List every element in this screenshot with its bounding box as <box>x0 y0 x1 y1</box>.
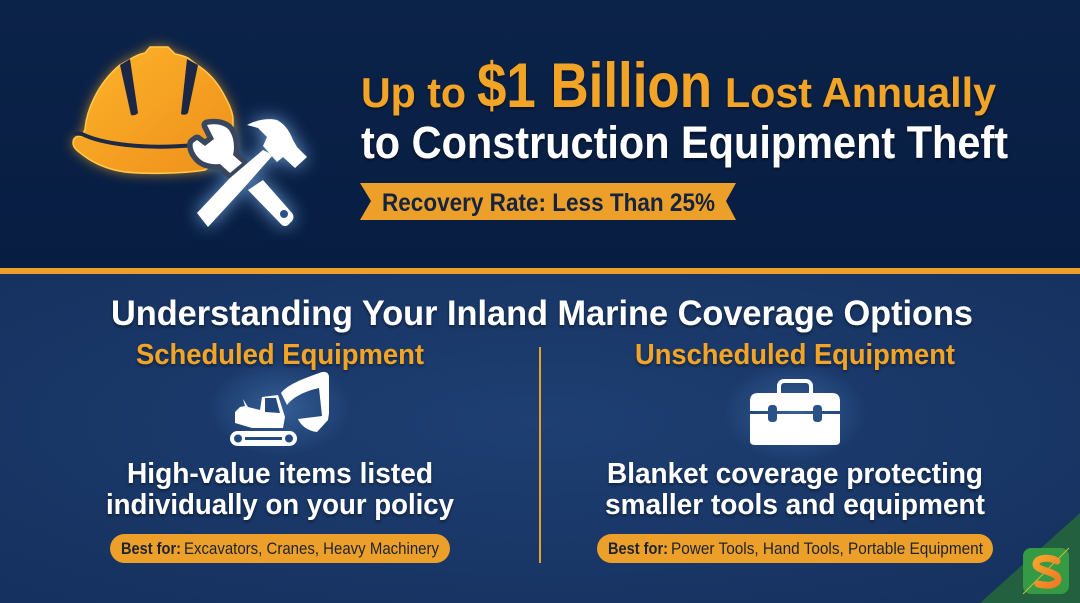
pill: best for unscheduled: Power Tools, Hand Tools, Portable Equipment <box>671 540 983 558</box>
panel: lower background <box>0 274 1080 603</box>
vertical divider <box>539 347 541 563</box>
pill: best for unscheduled <box>597 534 993 563</box>
logo: green corner with S mark <box>980 513 1080 603</box>
pill: best for scheduled: Excavators, Cranes, Heavy Machinery <box>184 540 440 558</box>
heading: unscheduled equipment: Unscheduled Equipment <box>635 339 955 371</box>
description: unscheduled equipment: smaller tools and equipment <box>605 489 986 521</box>
title: Lost Annually <box>725 69 997 116</box>
panel: unscheduled equipment <box>597 339 993 563</box>
pill: best for scheduled <box>110 534 450 563</box>
title: to Construction Equipment Theft <box>361 117 1008 168</box>
heading: coverage options: Understanding Your Inland Marine Coverage Options <box>111 294 973 333</box>
title: $1 Billion <box>477 51 712 121</box>
description: unscheduled equipment <box>605 458 986 521</box>
title <box>361 51 1008 168</box>
description: scheduled equipment: individually on your policy <box>106 489 454 521</box>
pill: best for unscheduled: Best for: <box>608 540 668 558</box>
icon: hard hat with tools <box>72 47 307 227</box>
icon: toolbox <box>723 362 867 462</box>
description: scheduled equipment <box>106 458 454 521</box>
description: scheduled equipment: High-value items listed <box>127 458 433 490</box>
orange divider band <box>0 268 1080 274</box>
panel: top header background <box>0 0 1080 269</box>
callout: recovery rate ribbon <box>360 183 736 220</box>
pill: best for scheduled: Best for: <box>121 540 181 558</box>
panel: scheduled equipment <box>106 339 454 563</box>
callout: recovery rate ribbon: Recovery Rate: Less Than 25% <box>382 189 715 217</box>
description: unscheduled equipment: Blanket coverage protecting <box>607 458 983 490</box>
heading: scheduled equipment: Scheduled Equipment <box>136 339 424 371</box>
title: Up to <box>361 69 466 116</box>
icon: excavator <box>208 360 352 456</box>
